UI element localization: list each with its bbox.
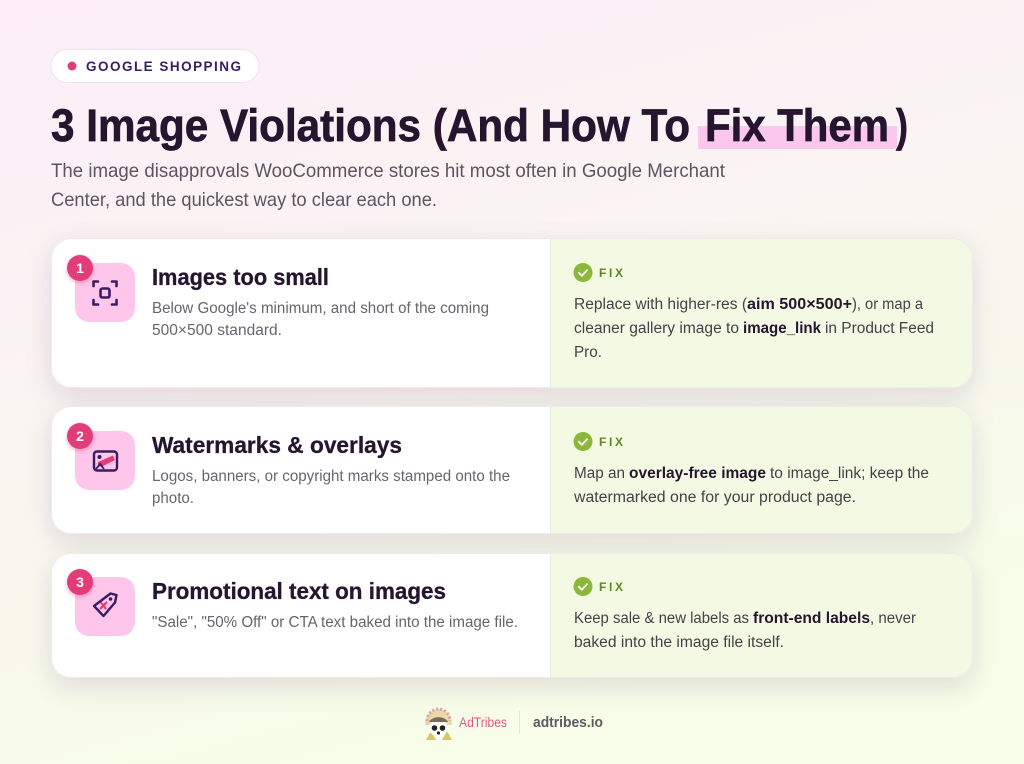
problem text 3: Promotional text on images [152, 578, 446, 604]
fix 1: ), or map a [852, 296, 923, 313]
fix 1: image_link [743, 320, 821, 337]
footer brand [425, 709, 603, 740]
icon: price tag [67, 569, 135, 636]
panel: violation 3 [51, 553, 973, 678]
fix 1: aim 500×500+ [747, 296, 852, 313]
problem text 2 [152, 432, 510, 507]
icon: panda logo [425, 709, 452, 740]
fix 3: baked into the image file itself. [574, 634, 784, 651]
icon: focus frame [67, 255, 135, 322]
fix 2: Map an [574, 465, 625, 482]
fix 1: cleaner gallery image to [574, 320, 739, 337]
problem text 1: 500×500 standard. [152, 322, 282, 339]
title: 3 Image Violations (And How To [51, 100, 690, 151]
fix 2 [573, 432, 929, 506]
subtitle: Center, and the quickest way to clear each one. [51, 189, 437, 211]
problem text 1: Images too small [152, 264, 329, 290]
fix 3: FIX [599, 580, 623, 594]
icon: focus frame: 1 [76, 260, 84, 276]
fix 1: FIX [599, 266, 623, 280]
fix 2: overlay-free image [629, 465, 766, 482]
problem text 3: "Sale", "50% Off" or CTA text baked into the image file. [152, 614, 518, 631]
problem text 3 [152, 578, 518, 631]
category pill: GOOGLE SHOPPING [86, 59, 241, 74]
problem text 1 [152, 264, 489, 339]
title: Fix Them [705, 100, 889, 151]
icon: watermarked image [67, 423, 135, 490]
panel: violation 2 [51, 406, 973, 534]
problem text 2: Logos, banners, or copyright marks stamped onto the [152, 468, 510, 485]
fix 3 [574, 577, 916, 651]
fix 2: FIX [599, 435, 623, 449]
fix 3: , never [870, 610, 916, 627]
fix 1: Replace with higher-res ( [574, 296, 748, 313]
fix 2: watermarked one for your product page. [573, 489, 856, 506]
subtitle [51, 160, 726, 211]
footer brand: AdTribes [459, 715, 507, 730]
icon: watermarked image: 2 [76, 428, 84, 444]
problem text 2: photo. [152, 490, 194, 507]
footer brand: adtribes.io [533, 714, 603, 731]
icon: price tag: 3 [76, 574, 84, 590]
subtitle: The image disapprovals WooCommerce stores hit most often in Google Merchant [51, 160, 726, 182]
category pill [51, 50, 259, 82]
fix 3: Keep sale & new labels as [574, 610, 749, 627]
title: ) [896, 100, 908, 151]
problem text 2: Watermarks & overlays [152, 432, 402, 458]
fix 3: front-end labels [753, 610, 870, 627]
fix 1: in Product Feed [825, 320, 934, 337]
problem text 1: Below Google's minimum, and short of the coming [152, 300, 489, 317]
fix 2: to image_link; keep the [770, 465, 929, 482]
fix 1 [574, 263, 934, 361]
fix 1: Pro. [574, 344, 602, 361]
panel: violation 1 [51, 238, 973, 388]
